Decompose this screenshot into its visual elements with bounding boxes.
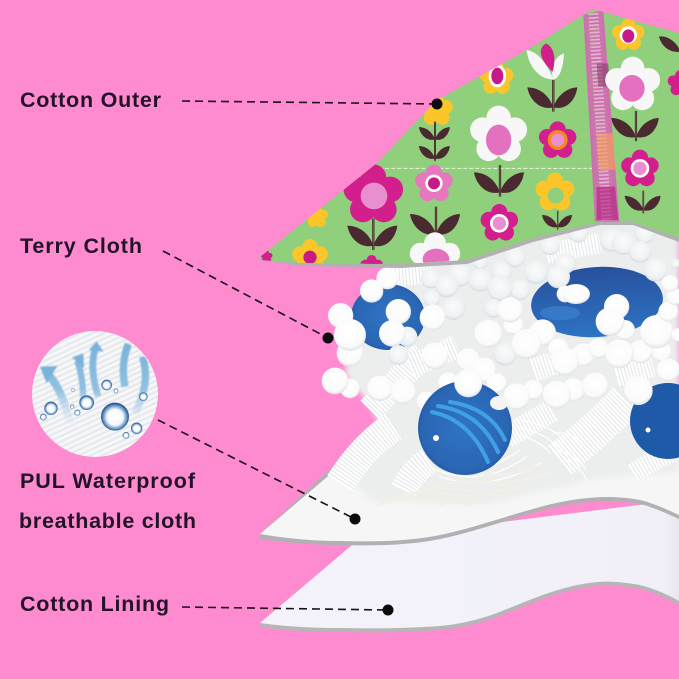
label: PUL waterproof breathable cloth: breathable cloth	[19, 509, 196, 533]
label: cotton lining: Cotton Lining	[20, 592, 169, 616]
glass bead bottom	[418, 381, 512, 475]
glass bead right	[630, 383, 679, 459]
glass bead left	[351, 284, 425, 350]
lower fringe on sheet	[376, 465, 550, 506]
label: PUL waterproof breathable cloth: PUL Waterproof	[20, 469, 196, 493]
terry fringe strands	[340, 243, 679, 490]
callout line: cotton lining	[182, 604, 394, 616]
callout line: PUL waterproof	[158, 420, 360, 524]
label: cotton outer: Cotton Outer	[20, 88, 162, 112]
layer: PUL waterproof sheet	[260, 420, 679, 545]
water droplets	[40, 380, 148, 439]
tulip	[527, 43, 564, 79]
flowers	[612, 18, 644, 50]
layer: cotton lining	[260, 500, 679, 632]
green layer edge	[260, 217, 679, 268]
stitching	[382, 168, 592, 169]
lace stripe	[583, 10, 619, 222]
callout line: cotton outer	[182, 98, 442, 110]
callout line: terry cloth	[163, 251, 334, 344]
breathable arrows	[40, 341, 145, 423]
label: terry cloth: Terry Cloth	[20, 234, 142, 258]
white spot on right bead	[646, 428, 650, 432]
glass bead top right	[529, 262, 665, 342]
layer: cotton outer	[255, 0, 679, 281]
icon: breathable waterproof cloth circle	[32, 331, 158, 457]
layer: terry cloth	[322, 220, 679, 506]
back spheres	[376, 223, 679, 366]
terry base	[338, 220, 679, 505]
sphere over bottom bead	[454, 369, 653, 405]
front spheres	[322, 275, 679, 412]
cloth disc	[32, 331, 158, 457]
label: PUL waterproof breathable cloth	[19, 469, 196, 533]
floral print	[260, 9, 679, 264]
